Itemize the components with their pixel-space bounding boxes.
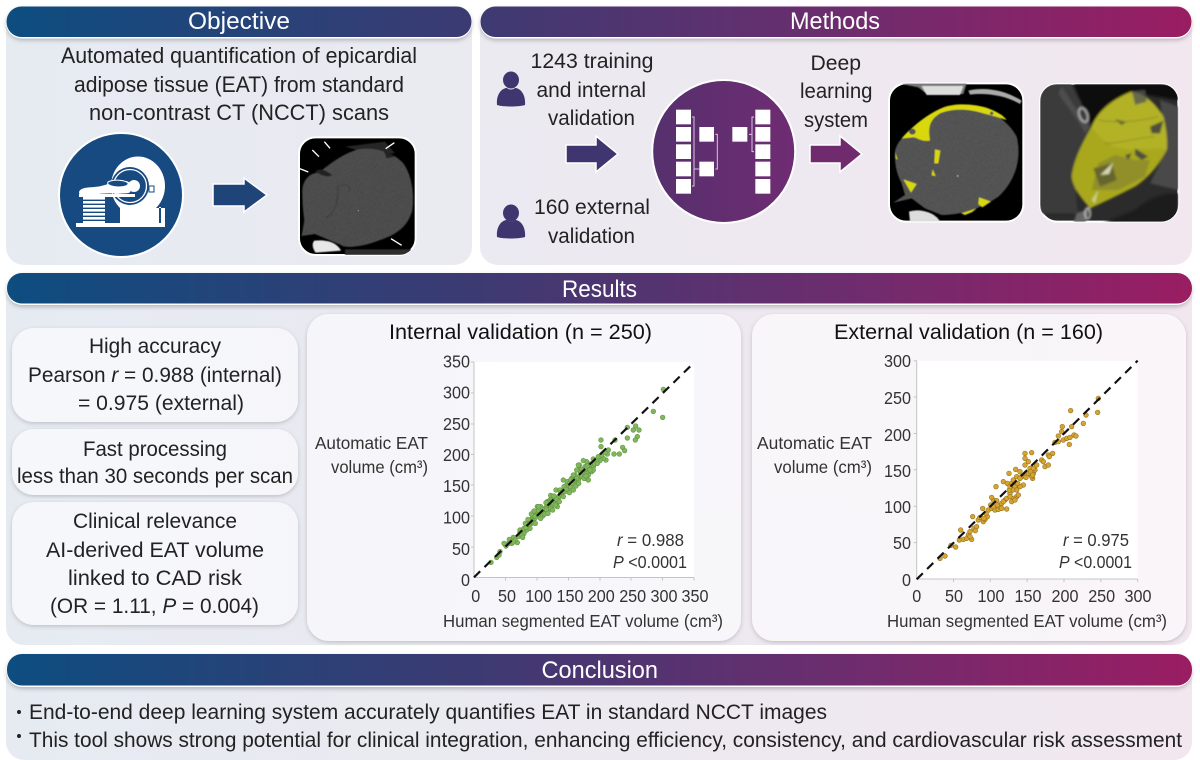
x tick labels: external: 150 bbox=[1014, 586, 1042, 606]
stats: internal: r = 0.988 bbox=[617, 530, 684, 550]
card: high accuracy bbox=[12, 328, 298, 422]
y tick labels: external: 200 bbox=[884, 425, 911, 445]
x tick labels: internal: 300 bbox=[650, 586, 678, 606]
panel: objective bbox=[6, 6, 472, 265]
y axis label: internal: volume (cm³) bbox=[331, 457, 428, 477]
scatter points: external bbox=[938, 396, 1101, 561]
external text: validation bbox=[548, 225, 635, 248]
x axis label: internal: Human segmented EAT volume (cm³) bbox=[443, 611, 723, 631]
y tick labels: internal: 150 bbox=[443, 476, 470, 496]
y tick labels: external: 100 bbox=[884, 497, 911, 517]
y tick labels: internal: 100 bbox=[443, 508, 470, 528]
panel: external validation chart bbox=[752, 314, 1186, 641]
external text bbox=[534, 196, 650, 248]
results header: Results bbox=[562, 276, 637, 303]
objective text bbox=[61, 43, 417, 125]
y tick labels: internal: 350 bbox=[443, 352, 470, 372]
conclusion bullet two: This tool shows strong potential for clinical integration, enhancing efficiency, consistency, and cardiovascular risk assessment bbox=[29, 729, 1182, 752]
x tick labels: external: 0 bbox=[912, 586, 921, 606]
axes: internal bbox=[471, 362, 694, 580]
card: high accuracy: Pearson r = 0.988 (internal) bbox=[28, 364, 282, 387]
arrow: to network bbox=[566, 136, 618, 172]
x tick labels: internal bbox=[471, 586, 709, 606]
training text bbox=[530, 50, 654, 130]
x tick labels: external bbox=[912, 586, 1152, 606]
objective text: adipose tissue (EAT) from standard bbox=[74, 72, 404, 97]
y tick labels: internal: 0 bbox=[461, 570, 470, 590]
x tick labels: internal: 0 bbox=[471, 586, 480, 606]
y axis label: external: volume (cm³) bbox=[774, 457, 872, 477]
icon: CT scanner bbox=[59, 133, 183, 257]
card: clinical relevance: (OR = 1.11, P = 0.004) bbox=[50, 595, 259, 618]
y tick labels: external: 300 bbox=[884, 351, 911, 371]
card: fast processing bbox=[12, 429, 298, 495]
chart title: internal: Internal validation (n = 250) bbox=[389, 321, 652, 344]
y tick labels: internal: 300 bbox=[443, 383, 470, 403]
panel: internal validation chart bbox=[307, 314, 741, 641]
x tick labels: external: 250 bbox=[1088, 586, 1115, 606]
methods header bbox=[480, 6, 1192, 38]
y tick labels: external bbox=[884, 351, 911, 590]
panel: conclusion bbox=[6, 654, 1192, 760]
conclusion bullet one: End-to-end deep learning system accurately quantifies EAT in standard NCCT images bbox=[29, 701, 827, 724]
image: 3D segmented heart bbox=[1040, 84, 1178, 223]
objective text: Automated quantification of epicardial bbox=[61, 43, 417, 68]
image: segmented CT bbox=[889, 83, 1023, 222]
y tick labels: internal: 250 bbox=[443, 414, 470, 434]
card: clinical relevance: Clinical relevance bbox=[73, 510, 237, 533]
y tick labels: external: 150 bbox=[884, 461, 911, 481]
training text: validation bbox=[548, 107, 635, 130]
results header bbox=[6, 273, 1192, 305]
card: high accuracy: = 0.975 (external) bbox=[78, 392, 244, 415]
panel: results bbox=[6, 273, 1192, 645]
stats: external: r = 0.975 bbox=[1063, 530, 1129, 550]
y tick labels: internal: 200 bbox=[443, 445, 470, 465]
plot area: external bbox=[917, 361, 1138, 579]
deep learning text: Deep bbox=[810, 52, 861, 75]
chart title: external: External validation (n = 160) bbox=[834, 321, 1103, 344]
x tick labels: internal: 100 bbox=[525, 586, 552, 606]
plot area: internal bbox=[474, 362, 694, 578]
x tick labels: internal: 50 bbox=[498, 586, 516, 606]
x tick labels: external: 100 bbox=[978, 586, 1005, 606]
panel: methods bbox=[480, 6, 1192, 265]
axes: external bbox=[914, 361, 1138, 582]
deep learning text bbox=[800, 52, 872, 132]
objective header bbox=[6, 6, 472, 38]
x tick labels: external: 50 bbox=[945, 586, 963, 606]
stats: external bbox=[1059, 530, 1132, 572]
card: clinical relevance bbox=[12, 502, 298, 625]
y tick labels: external: 250 bbox=[884, 388, 911, 408]
y tick labels: internal bbox=[443, 352, 470, 590]
icon: person training bbox=[497, 72, 525, 106]
x tick labels: internal: 350 bbox=[682, 586, 709, 606]
y axis label: internal: Automatic EAT bbox=[315, 433, 428, 453]
x tick labels: internal: 250 bbox=[619, 586, 646, 606]
card: clinical relevance: linked to CAD risk bbox=[68, 567, 243, 590]
x tick labels: external: 300 bbox=[1124, 586, 1152, 606]
deep learning text: system bbox=[804, 109, 868, 132]
y tick labels: external: 0 bbox=[902, 570, 911, 590]
conclusion header bbox=[6, 654, 1192, 687]
card: fast processing: Fast processing bbox=[83, 438, 227, 461]
card: clinical relevance: AI-derived EAT volume bbox=[46, 539, 264, 562]
stats: internal bbox=[613, 530, 687, 572]
icon: neural network bbox=[652, 80, 795, 223]
card: fast processing: less than 30 seconds per scan bbox=[17, 465, 293, 488]
x tick labels: external: 200 bbox=[1052, 586, 1079, 606]
objective text: non-contrast CT (NCCT) scans bbox=[89, 100, 389, 125]
x axis label: external: Human segmented EAT volume (cm³) bbox=[887, 611, 1167, 631]
identity line: external bbox=[917, 361, 1138, 579]
identity line: internal bbox=[474, 362, 694, 577]
deep learning text: learning bbox=[800, 80, 872, 103]
card: high accuracy: High accuracy bbox=[89, 335, 221, 358]
training text: 1243 training bbox=[530, 50, 654, 73]
stats: external: P <0.0001 bbox=[1059, 552, 1132, 572]
arrow: objective bbox=[213, 178, 267, 212]
stats: internal: P <0.0001 bbox=[613, 552, 687, 572]
x tick labels: internal: 150 bbox=[556, 586, 584, 606]
image: CT scan with arrows bbox=[299, 137, 416, 255]
scatter points: internal bbox=[489, 387, 666, 565]
x tick labels: internal: 200 bbox=[588, 586, 615, 606]
external text: 160 external bbox=[534, 196, 650, 219]
arrow: to output bbox=[810, 136, 862, 172]
y tick labels: external: 50 bbox=[893, 533, 911, 553]
training text: and internal bbox=[536, 79, 646, 102]
methods header: Methods bbox=[790, 8, 880, 35]
y axis label: internal bbox=[315, 433, 428, 477]
y axis label: external: Automatic EAT bbox=[757, 433, 872, 453]
y axis label: external bbox=[757, 433, 872, 477]
objective header: Objective bbox=[188, 8, 290, 35]
y tick labels: internal: 50 bbox=[452, 539, 470, 559]
icon: person external bbox=[497, 204, 525, 238]
conclusion header: Conclusion bbox=[542, 657, 658, 684]
